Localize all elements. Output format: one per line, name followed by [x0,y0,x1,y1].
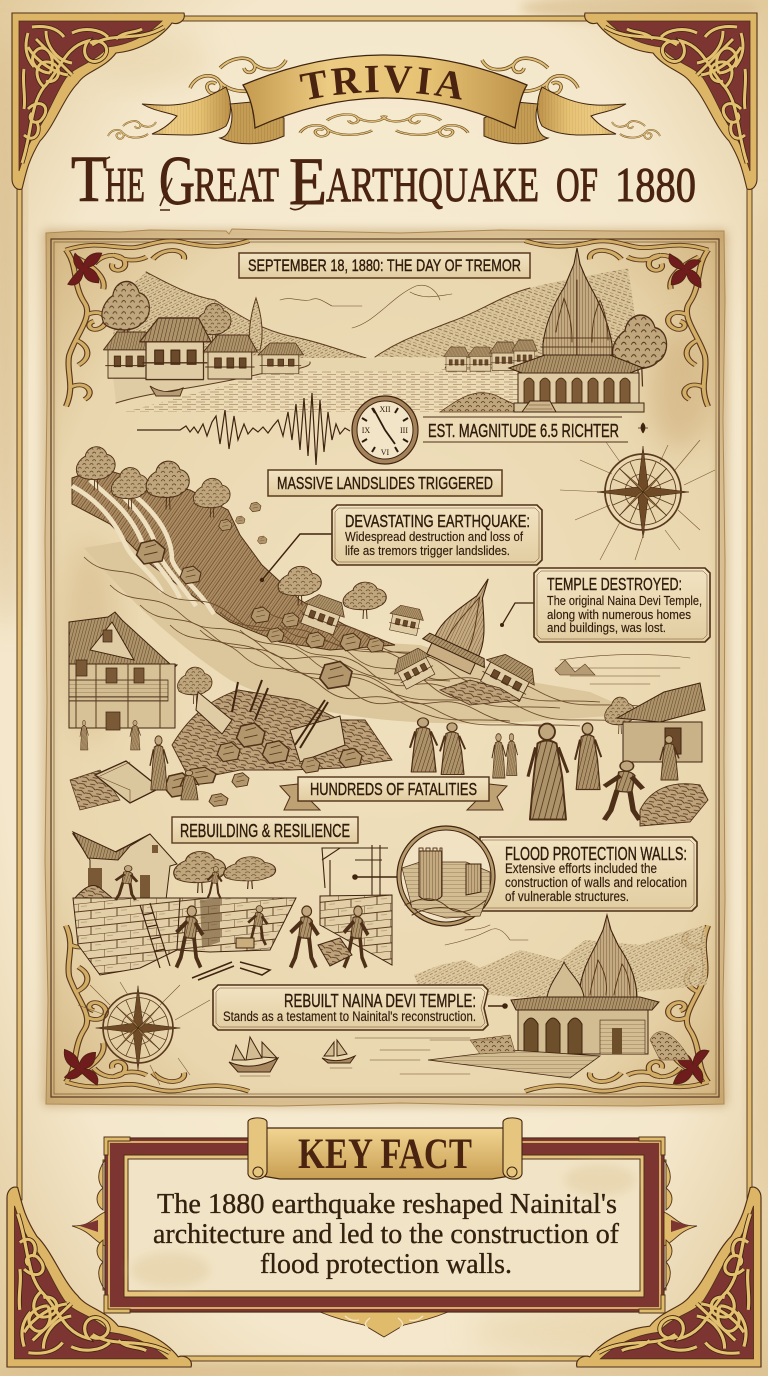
callout: temple destroyed: along with numerous homes [547,607,691,622]
clock [352,396,418,464]
clock: IX [362,426,370,435]
clock: VI [381,448,390,457]
main title: REAT [194,157,279,212]
callout: date [239,253,530,278]
key fact body text: architecture and led to the construction of [153,1218,619,1250]
heading: rebuilding: REBUILDING & RESILIENCE [180,821,350,841]
illustration: original Naina Devi temple [509,248,644,412]
illustration: landslide [72,447,690,726]
main title: T [71,143,107,216]
corner ornament: bottom right [577,1187,761,1367]
illustration: colonial house [69,612,177,730]
clock: XII [379,405,391,414]
medallion: flood wall [397,826,495,926]
banner title: TRIVIA [299,66,462,100]
illustration: Nainital lake before the quake [102,268,667,412]
corner ornament: top left [12,13,184,189]
main title: 1880 [615,157,696,212]
compass rose: lower [78,982,210,1085]
clock: III [400,426,408,435]
callout: devastating earthquake: DEVASTATING EARTHQUAKE: [345,511,530,531]
key fact body text [153,1188,619,1280]
main title: E [289,143,327,219]
callout: temple destroyed: The original Naina Devi Temple, [547,593,702,608]
callout: devastating earthquake [260,505,542,582]
key fact scroll heading [248,1118,522,1179]
callout: temple destroyed: and buildings, was lost. [547,620,666,635]
callout: date: SEPTEMBER 18, 1880: THE DAY OF TREMOR [248,256,521,275]
callout: rebuilt temple [213,985,508,1030]
illustration: rebuilt Naina Devi temple scene [355,915,707,1078]
seismograph trace [137,393,350,465]
corner ornament: top right [585,13,757,189]
trivia banner [107,54,661,144]
callout: magnitude [423,417,628,442]
callout: magnitude: EST. MAGNITUDE 6.5 RICHTER [428,421,619,441]
callout: flood protection walls: Extensive efforts included the [505,861,657,876]
ships [229,1037,355,1076]
callout: rebuilt temple: REBUILT NAINA DEVI TEMPLE: [284,991,476,1011]
parchment map panel [45,229,725,1106]
corner ornament: bottom left [7,1187,191,1367]
key fact body text: flood protection walls. [260,1248,512,1280]
callout: temple destroyed [500,568,710,642]
key fact frame [72,1137,697,1337]
illustration: villagers and hut [528,683,708,826]
callout: rebuilt temple: Stands as a testament to Nainital's reconstruction. [223,1009,476,1024]
callout: devastating earthquake: life as tremors trigger landslides. [345,543,510,558]
callout: devastating earthquake: Widespread destruction and loss of [345,529,523,544]
compass rose: upper [560,423,715,560]
key fact scroll heading: KEY FACT [298,1131,472,1178]
callout: flood protection walls: FLOOD PROTECTION WALLS: [505,844,687,864]
key fact body text: The 1880 earthquake reshaped Nainital's [157,1188,617,1220]
flood wall leader [352,874,397,880]
ribbon: hundreds of fatalities [280,777,507,810]
panel corner flourishes [50,240,722,1098]
callout: flood protection walls [480,837,697,911]
ribbon: hundreds of fatalities: HUNDREDS OF FATALITIES [310,779,477,799]
callout: massive landslides [268,470,502,496]
main title: G [159,143,195,220]
callout: flood protection walls: of vulnerable structures. [505,889,629,904]
callout: flood protection walls: construction of walls and relocation [505,875,687,890]
heading: rebuilding [172,817,358,843]
main title: ARTHQUAKE [326,157,539,212]
main title: HE [105,157,145,212]
illustration: rubble and survivors [70,667,518,810]
main title: OF [556,157,598,212]
callout: massive landslides: MASSIVE LANDSLIDES TRIGGERED [277,473,493,493]
illustration: rebuilding walls and workers [73,832,392,980]
main title [71,143,696,220]
callout: temple destroyed: TEMPLE DESTROYED: [547,574,682,594]
